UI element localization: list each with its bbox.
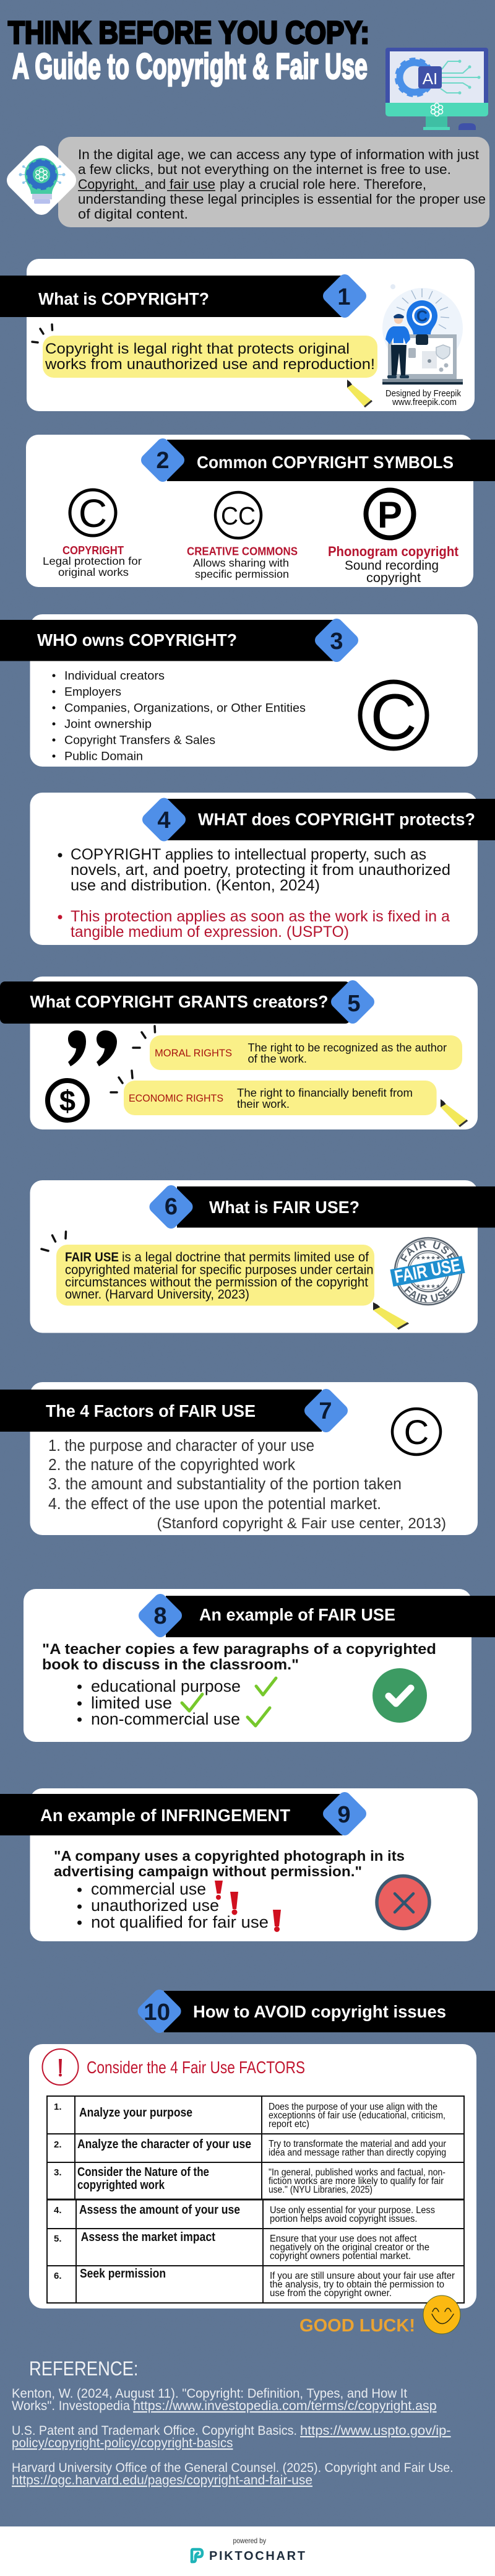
text: when protection applies: [58, 908, 450, 941]
list: copyright owners: Employers: [64, 685, 121, 698]
icon: fair use stamp: [390, 1237, 465, 1305]
row 3: Consider the Nature of the: [77, 2165, 209, 2179]
title: [8, 15, 369, 87]
text: scope of copyright: COPYRIGHT applies to intellectual property, such as: [71, 846, 426, 863]
text: phonogram description: [328, 544, 459, 585]
text block: references: policy/copyright-policy/copyright-basics: [12, 2435, 233, 2450]
icon: fair use stamp: ★★★★★: [416, 1283, 441, 1289]
number badge 10: 10: [144, 1999, 170, 2026]
callout: moral rights: of the work.: [248, 1052, 307, 1065]
row 2: Try to transformate the material and add your: [269, 2139, 446, 2149]
row 6: Seek permission: [80, 2267, 166, 2281]
text: fair use scenario: [42, 1641, 436, 1673]
number badge 2: 2: [156, 448, 170, 474]
panel: what copyright grants creators: [0, 977, 478, 1129]
panel: example of infringement: [0, 1788, 478, 1941]
heading bar: An example of FAIR USE: [199, 1605, 395, 1624]
row 2: [54, 2138, 446, 2158]
number badge 3: 3: [330, 629, 343, 655]
illustration: copyright officer with light bulb and laptop: C: [416, 308, 428, 325]
row 1: report etc): [269, 2119, 309, 2130]
icon: Piktochart logo: [192, 2549, 202, 2562]
row 3: fiction works are more likely to qualify for fair: [269, 2176, 444, 2187]
footer: powered by Piktochart: [0, 2526, 495, 2576]
callout: fair use definition: [56, 1245, 374, 1305]
heading bar: [177, 1186, 495, 1227]
footer: powered by Piktochart: PIKTOCHART: [209, 2549, 305, 2563]
list: copyright owners: [52, 669, 306, 763]
callout: economic rights: The right to financially benefit from: [237, 1086, 413, 1099]
icon: fair use stamp: FAIR USE: [393, 1255, 462, 1287]
number badge 2: [147, 445, 178, 476]
number badge 6: 6: [165, 1194, 178, 1220]
text block: references: U.S. Patent and Trademark Office. Copyright Basics.: [12, 2423, 297, 2438]
text: creative commons description: CREATIVE COMMONS: [187, 545, 298, 557]
heading bar: WHAT does COPYRIGHT protects?: [198, 810, 475, 829]
row 2: Analyze the character of your use: [77, 2138, 251, 2151]
list: copyright owners: Public Domain: [64, 749, 143, 763]
row 1: Does the purpose of your use align with the: [269, 2102, 437, 2112]
heading bar: WHO owns COPYRIGHT?: [37, 630, 237, 650]
heading bar: What COPYRIGHT GRANTS creators?: [30, 992, 328, 1011]
list: four factors: [48, 1437, 402, 1513]
number badge 4: [148, 804, 179, 835]
text block: references: https://www.uspto.gov/ip-: [300, 2423, 451, 2438]
text block: references: Works". Investopedia: [12, 2398, 130, 2413]
panel: the 4 factors of fair use: [0, 1382, 478, 1535]
text: introduction paragraph: and: [145, 176, 166, 192]
row 5: Assess the market impact: [81, 2230, 215, 2244]
list: infringement reasons: commercial use: [91, 1880, 206, 1899]
credit: Freepik: Designed by Freepik: [385, 389, 462, 399]
callout: definition: works from unauthorized use and reproduction!: [45, 356, 375, 373]
text: scope of copyright: [58, 846, 450, 894]
text: introduction paragraph: [78, 147, 486, 222]
row 1: 1.: [54, 2102, 62, 2112]
text: scope of copyright: use and distribution. (Kenton, 2024): [71, 877, 320, 894]
text: introduction paragraph: play a crucial role here. Therefore,: [220, 176, 426, 192]
row 5: negatively on the original creator or the: [270, 2242, 429, 2253]
row 4: portion helps avoid copyright issues.: [270, 2214, 417, 2224]
row 4: 4.: [54, 2205, 62, 2216]
icon: creative commons symbol: [215, 492, 261, 538]
callout: fair use definition: circumstances without the permission of the copyright: [65, 1276, 368, 1289]
callout: economic rights: ECONOMIC RIGHTS: [129, 1092, 223, 1104]
icon: dollar coin: $: [59, 1084, 75, 1117]
number badge 8: [145, 1600, 176, 1631]
panel: consider the fair use factors: [29, 2044, 476, 2308]
heading bar: What is FAIR USE?: [209, 1198, 359, 1217]
heading bar: [166, 1596, 495, 1637]
text: copyright description: Legal protection for: [43, 555, 142, 567]
text: copyright description: original works: [58, 566, 129, 578]
icon: AI monitor: AI: [423, 69, 437, 88]
icon: smiley: [423, 2295, 460, 2334]
callout: fair use definition: owner. (Harvard University, 2023): [65, 1287, 249, 1302]
row 4: Assess the amount of your use: [79, 2203, 240, 2217]
list: fair use reasons: non-commercial use: [91, 1710, 240, 1728]
text: good luck: GOOD LUCK!: [299, 2316, 415, 2336]
callout: moral rights: MORAL RIGHTS: [155, 1047, 232, 1059]
text: fair use scenario: "A teacher copies a few paragraphs of a copyrighted: [42, 1641, 436, 1658]
row 6: If you are still unsure about your fair use after: [270, 2271, 455, 2281]
text: copyright description: [43, 544, 142, 578]
list: copyright owners: Companies, Organizations, or Other Entities: [64, 701, 306, 715]
row 3: copyrighted work: [77, 2178, 165, 2192]
row 5: copyright owners potential market.: [270, 2251, 411, 2261]
icon: fair use stamp: FAIR USE: [404, 1286, 452, 1303]
heading bar: The 4 Factors of FAIR USE: [46, 1401, 256, 1421]
list: copyright owners: Copyright Transfers & Sales: [64, 733, 215, 747]
text: creative commons description: Allows sharing with: [193, 557, 289, 569]
credit: Freepik: www.freepik.com: [392, 398, 457, 407]
heading bar: [167, 799, 495, 840]
row 1: exceptionns of fair use (educational, criticism,: [269, 2110, 446, 2121]
number badge 5: [337, 986, 368, 1017]
text: when protection applies: This protection applies as soon as the work is fixed in a: [71, 908, 450, 925]
text: creative commons description: specific permission: [195, 568, 289, 580]
text block: references: Kenton, W. (2024, August 11). "Copyright: Definition, Types, and How It: [12, 2386, 407, 2401]
list: copyright owners: Individual creators: [64, 669, 165, 682]
list: infringement reasons: unauthorized use: [91, 1896, 219, 1915]
text: infringement scenario: advertising campaign without permission.": [54, 1863, 362, 1879]
text: introduction paragraph: of digital content.: [78, 206, 188, 222]
icon: emphasis ticks: [32, 324, 52, 342]
text: scope of copyright: novels, art, and poetry, protecting it from unauthorized: [71, 861, 450, 879]
callout: fair use definition: copyrighted material for specific purposes under certain: [65, 1263, 374, 1277]
callout: definition: Copyright is legal right that protects original: [45, 341, 350, 357]
icon: emphasis ticks: [133, 1026, 155, 1048]
icon: approved badge: [372, 1668, 427, 1723]
icon: copyright symbol: C: [404, 1412, 429, 1451]
heading bar: [0, 1390, 322, 1432]
text: introduction paragraph: understanding these legal principles is essential for the proper use: [78, 191, 486, 207]
icon: exclamation circle: [42, 2049, 78, 2085]
row 4: [54, 2203, 435, 2224]
subheading: Consider the 4 Fair Use FACTORS: [87, 2058, 305, 2077]
heading bar: [0, 981, 350, 1024]
heading bar: [167, 440, 495, 481]
icon: quotation marks: [68, 1030, 117, 1066]
text block: references: https://ogc.harvard.edu/pages/copyright-and-fair-use: [12, 2473, 312, 2487]
row 3: [54, 2165, 446, 2195]
list: fair use reasons: educational purpose: [91, 1677, 241, 1695]
icon: highlighter: [373, 1302, 408, 1329]
heading bar: What is COPYRIGHT?: [38, 289, 209, 308]
row 6: [54, 2267, 455, 2299]
icon: copyright symbol: [360, 681, 427, 753]
callout: definition: [43, 336, 377, 378]
heading bar: An example of INFRINGEMENT: [40, 1806, 290, 1825]
panel: example of fair use: [24, 1589, 495, 1742]
icons: red exclamation marks: [215, 1881, 281, 1932]
list: fair use reasons: limited use: [91, 1694, 172, 1712]
callout: moral rights: The right to be recognized as the author: [248, 1041, 447, 1054]
row 5: Ensure that your use does not affect: [270, 2234, 417, 2244]
callout: moral rights: [150, 1035, 462, 1070]
row 1: Analyze your purpose: [79, 2106, 192, 2120]
icon: AI monitor: [385, 48, 488, 130]
text: introduction paragraph: Copyright,: [78, 176, 138, 192]
list: infringement reasons: not qualified for fair use: [91, 1913, 269, 1931]
icon: rejected badge: [377, 1876, 429, 1928]
row 3: 3.: [54, 2167, 62, 2178]
icon: copyright symbol: C: [370, 681, 417, 753]
text: introduction paragraph: In the digital age, we can access any type of information with just: [78, 147, 479, 162]
number badge 8: 8: [153, 1603, 167, 1629]
row 5: [54, 2230, 429, 2261]
list: four factors: 2. the nature of the copyrighted work: [48, 1456, 295, 1474]
row 1: [54, 2102, 446, 2130]
heading bar: Common COPYRIGHT SYMBOLS: [197, 453, 454, 472]
icon: dollar coin: [48, 1081, 87, 1120]
number badge 1: [329, 281, 360, 311]
panel: what does copyright protect: [30, 793, 495, 945]
heading bar: [0, 276, 342, 317]
list: copyright owners: Joint ownership: [64, 717, 152, 731]
number badge 9: 9: [337, 1802, 351, 1828]
icon: emphasis ticks: [111, 1071, 132, 1092]
row 2: idea and message rather than directly copying: [269, 2147, 446, 2158]
icon: phonogram symbol: [366, 490, 413, 537]
section header: how to avoid copyright issues: [144, 1991, 495, 2032]
callout: economic rights: [124, 1081, 437, 1115]
text: phonogram description: Sound recording: [345, 558, 439, 573]
heading bar: [0, 620, 335, 661]
footer: powered by Piktochart: powered by: [233, 2536, 266, 2545]
text block: references: https://www.investopedia.com/terms/c/copyright.asp: [133, 2398, 437, 2413]
icon: creative commons symbol: CC: [221, 502, 256, 530]
icon: copyright symbol: C: [79, 491, 107, 536]
number badge 5: 5: [347, 991, 361, 1017]
text: copyright description: COPYRIGHT: [62, 544, 124, 557]
row 2: 2.: [54, 2139, 62, 2150]
text: citation: (Stanford copyright & Fair use center, 2013): [157, 1515, 446, 1532]
text: phonogram description: Phonogram copyright: [328, 544, 459, 559]
icon: copyright symbol: [70, 490, 116, 536]
panel: what is copyright: [0, 259, 475, 411]
text: when protection applies: tangible medium of expression. (USPTO): [71, 923, 349, 941]
number badge 9: [329, 1798, 360, 1829]
row 6: 6.: [54, 2271, 62, 2281]
illustration: copyright officer with light bulb and laptop: [382, 284, 463, 385]
icons: green check marks: [182, 1678, 276, 1726]
list: four factors: 4. the effect of the use upon the potential market.: [48, 1495, 381, 1513]
row 5: 5.: [54, 2234, 62, 2244]
table: steps to avoid issues: [47, 2096, 464, 2303]
title: THINK BEFORE YOU COPY:: [8, 15, 369, 50]
panel: who owns copyright: [0, 614, 478, 767]
icon: emphasis ticks: [41, 1232, 66, 1251]
credit: Freepik: [385, 389, 462, 407]
text: introduction paragraph: a few clicks, but not everything on the internet is free to use.: [78, 162, 451, 177]
icon: highlighter: [441, 1099, 467, 1126]
callout: fair use definition: is a legal doctrine that permits limited use of: [122, 1250, 369, 1264]
number badge 7: 7: [319, 1398, 332, 1424]
text block: references: [12, 2386, 454, 2487]
section header: how to avoid copyright issues: How to AVOID copyright issues: [193, 2002, 446, 2021]
icon: highlighter: [347, 380, 372, 407]
text: phonogram description: copyright: [366, 570, 421, 585]
icon: copyright symbol: [392, 1409, 441, 1455]
list: fair use reasons: [77, 1677, 241, 1728]
row 6: use from the copyright owner.: [270, 2288, 392, 2299]
list: infringement reasons: [77, 1880, 269, 1931]
text: fair use scenario: book to discuss in the classroom.": [42, 1656, 299, 1673]
number badge 1: 1: [337, 284, 351, 310]
row 6: the analysis, try to obtain the permission to: [270, 2279, 444, 2290]
text: introduction paragraph: fair use: [170, 176, 215, 192]
list: four factors: 1. the purpose and character of your use: [48, 1437, 314, 1455]
callout: economic rights: their work.: [237, 1097, 290, 1110]
number badge 7: [311, 1395, 342, 1426]
text: creative commons description: [187, 545, 298, 580]
icon: lightbulb: [17, 155, 66, 205]
panel: what is fair use: [30, 1180, 495, 1333]
row 3: "In general, published works and factual, non-: [269, 2167, 446, 2178]
number badge 6: [156, 1191, 187, 1222]
row 4: Use only essential for your purpose. Less: [270, 2205, 435, 2216]
panel: introduction: [58, 137, 489, 227]
callout: fair use definition: FAIR USE: [65, 1250, 119, 1264]
icon: fair use stamp: ★★★★★: [416, 1255, 441, 1261]
number badge 3: [321, 625, 352, 656]
panel: common copyright symbols: [26, 435, 495, 587]
heading bar: [0, 1794, 343, 1835]
row 3: use." (NYU Libraries, 2025): [269, 2185, 372, 2195]
heading: reference: REFERENCE:: [29, 2357, 139, 2380]
number badge 4: 4: [157, 807, 171, 833]
icon: fair use stamp: FAIR USE: [400, 1241, 455, 1262]
list: four factors: 3. the amount and substantiality of the portion taken: [48, 1476, 402, 1493]
text: infringement scenario: [54, 1848, 405, 1879]
text block: references: Harvard University Office of the General Counsel. (2025). Copyright and Fair Use.: [12, 2460, 454, 2475]
icon: phonogram symbol: P: [377, 494, 402, 536]
text: infringement scenario: "A company uses a copyrighted photograph in its: [54, 1848, 405, 1864]
